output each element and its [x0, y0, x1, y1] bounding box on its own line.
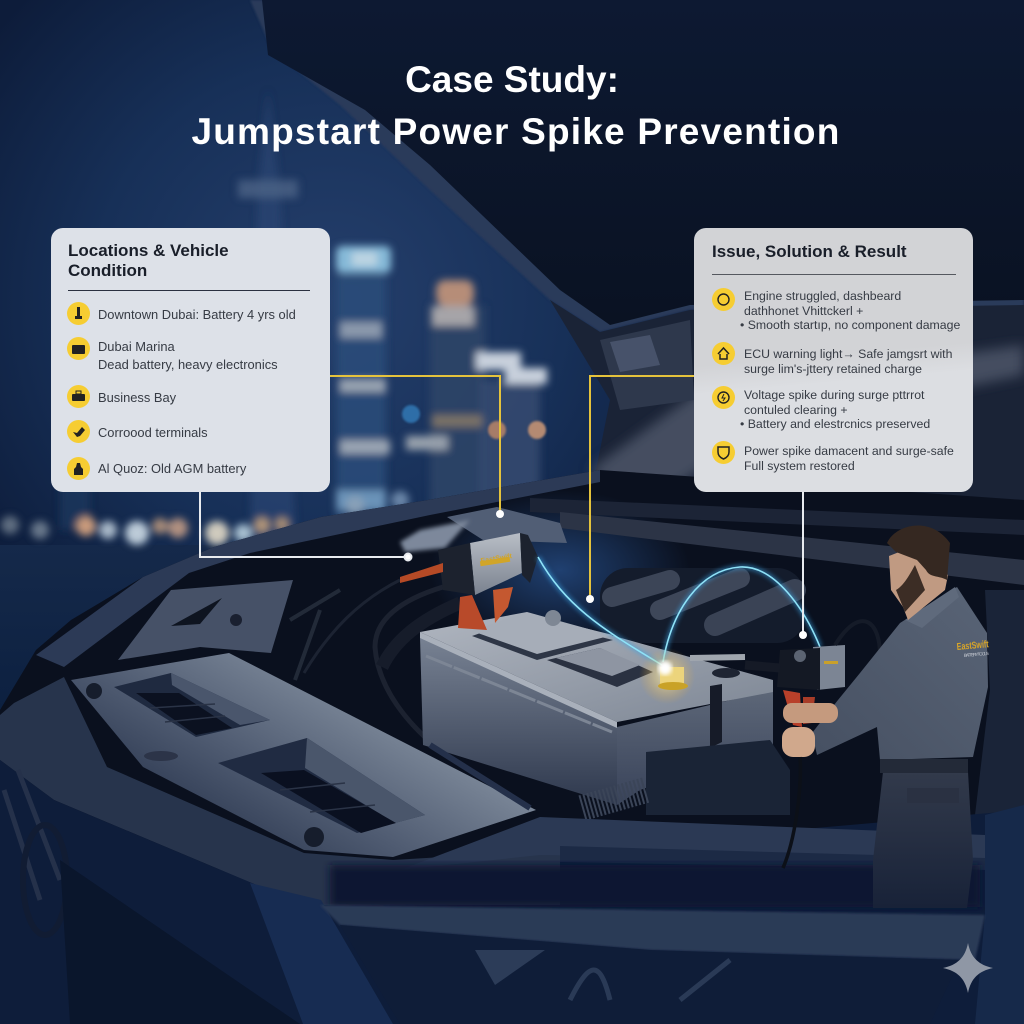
blue energy arcs — [538, 557, 820, 665]
issue 3 text — [740, 388, 930, 431]
engine bay — [0, 470, 1024, 880]
issue 1 text — [740, 289, 960, 332]
connector: right panel to right surge unit (white) — [799, 492, 807, 639]
surge protector unit with clamps — [400, 533, 538, 630]
engine cover — [600, 568, 805, 643]
icon: shield — [712, 441, 735, 464]
icon: landmark — [67, 302, 90, 325]
issue 1 text: Engine struggled, dashbeard — [744, 289, 901, 303]
location 2 text — [98, 339, 278, 372]
technician: EastSwift — [956, 639, 990, 653]
icon: battery bag — [67, 457, 90, 480]
panel: locations and vehicle condition — [51, 228, 330, 492]
panel: issue, solution and result — [694, 228, 973, 492]
connector: right panel to engine (yellow) — [586, 376, 694, 603]
car front bumper upper — [0, 760, 1024, 1024]
technician — [782, 526, 990, 908]
location 1 text: Downtown Dubai: Battery 4 yrs old — [98, 307, 296, 322]
issue 4 text: Full system restored — [744, 459, 855, 473]
panel heading: Issue, Solution & Result — [712, 242, 907, 261]
issue 3 text: • Battery and elestrcnics preserved — [740, 417, 930, 431]
open hood underside — [250, 0, 1024, 520]
icon: toolbox — [67, 385, 90, 408]
technician: BATTERY TOOLS — [964, 651, 989, 658]
hose and pipe — [582, 740, 790, 815]
title: Jumpstart Power Spike Prevention — [191, 111, 841, 152]
issue 1 text: • Smooth startıp, no component damage — [740, 318, 960, 332]
connector: left panel to fuse box (yellow) — [330, 376, 504, 518]
icon: face — [712, 288, 735, 311]
location 3 text: Business Bay — [98, 390, 176, 405]
panel heading: Condition — [68, 261, 147, 280]
surge protector unit with clamps: EastSwift — [480, 553, 513, 565]
icon: voltage — [712, 386, 735, 409]
icon: battery case — [67, 337, 90, 360]
sparkle watermark — [943, 943, 993, 993]
location 2 text: Dubai Marina — [98, 339, 175, 354]
battery — [420, 610, 773, 805]
surge unit held by technician — [745, 621, 880, 690]
location 3 detail text: Corroood terminals — [98, 425, 208, 440]
location 2 text: Dead battery, heavy electronics — [98, 357, 278, 372]
issue 2 text: surge lim's-jttery retained charge — [744, 362, 922, 376]
title — [191, 59, 841, 152]
car front bumper lower strip and headlight — [320, 905, 985, 1024]
issue 2 text — [744, 347, 952, 376]
issue 3 text: contuled clearing + — [744, 402, 848, 416]
icon: wrench — [67, 420, 90, 443]
panel heading: Locations & Vehicle — [68, 241, 229, 260]
issue 2 text: ECU warning light→ Safe jamgsrt with — [744, 347, 952, 361]
title: Case Study: — [405, 59, 619, 100]
location 4 text: Al Quoz: Old AGM battery — [98, 461, 246, 476]
connector: left panel to clamp unit (white) — [200, 492, 412, 560]
hood front fender and cover plate — [0, 653, 560, 905]
issue 1 text: dathhonet Vhittckerl + — [744, 304, 863, 318]
icon: house warning — [712, 342, 735, 365]
issue 4 text: Power spike damacent and surge-safe — [744, 444, 954, 458]
issue 3 text: Voltage spike during surge pttrrot — [744, 388, 924, 402]
spark on battery terminal — [639, 648, 695, 704]
issue 4 text — [744, 444, 954, 473]
panel heading — [68, 241, 229, 280]
